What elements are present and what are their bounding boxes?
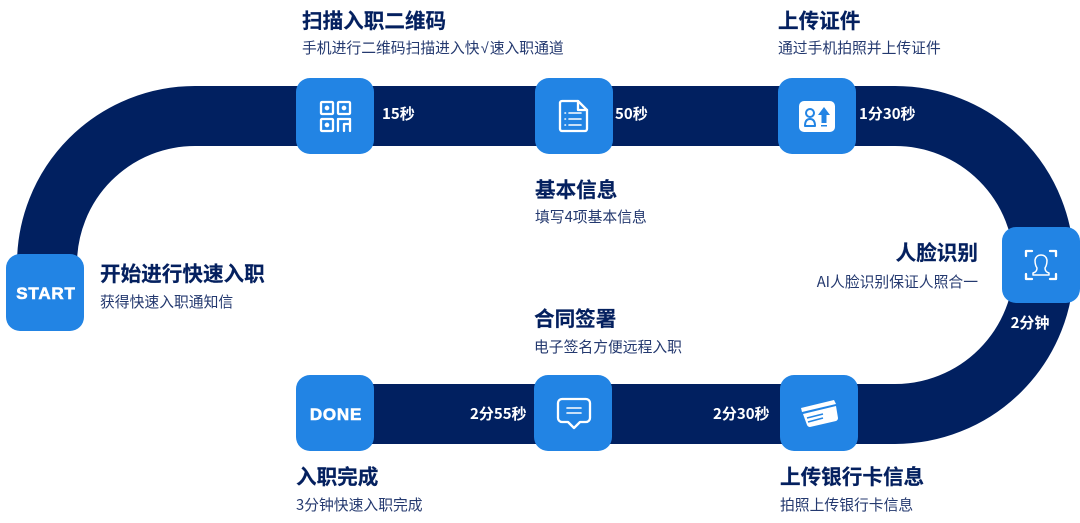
icon: document — [560, 101, 587, 131]
step: upload ID: 上传证件 — [778, 4, 860, 34]
step: bank card: 拍照上传银行卡信息 — [780, 494, 913, 515]
step: start — [6, 254, 265, 331]
step: start: 获得快速入职通知信 — [100, 291, 233, 312]
step: basic information: 50秒 — [615, 103, 648, 124]
step: face recognition — [817, 227, 1080, 333]
icon: ID upload — [799, 101, 835, 132]
step: upload ID: 通过手机拍照并上传证件 — [778, 37, 941, 58]
step: bank card — [713, 375, 924, 515]
step: contract signing: 合同签署 — [534, 302, 616, 332]
step: face recognition: AI人脸识别保证人照合一 — [817, 271, 978, 292]
step: done: DONE — [310, 405, 362, 424]
step: start: START — [16, 284, 76, 303]
step: scan QR code: 扫描入职二维码 — [302, 4, 446, 34]
step: bank card: 上传银行卡信息 — [780, 460, 924, 490]
step: contract signing: 2分55秒 — [470, 403, 527, 424]
icon: face scan — [1026, 251, 1056, 279]
icon: bank card — [801, 400, 838, 427]
step: start: 开始进行快速入职 — [100, 257, 265, 287]
step: upload ID: 1分30秒 — [859, 103, 916, 124]
step: done: 3分钟快速入职完成 — [296, 494, 423, 515]
step: face recognition: 人脸识别 — [896, 236, 978, 266]
process track — [47, 116, 1044, 414]
step: scan QR code: 15秒 — [382, 103, 415, 124]
step: basic information — [535, 78, 648, 227]
step: done — [296, 375, 423, 515]
step: scan QR code: 手机进行二维码扫描进入快√速入职通道 — [302, 37, 564, 58]
icon: message — [558, 399, 590, 428]
step: basic information: 基本信息 — [535, 173, 617, 203]
step: done: 入职完成 — [296, 460, 378, 490]
step: basic information: 填写4项基本信息 — [535, 206, 647, 227]
step: scan QR code — [296, 4, 564, 154]
step: bank card: 2分30秒 — [713, 403, 770, 424]
step: contract signing: 电子签名方便远程入职 — [534, 336, 682, 357]
step: face recognition: 2分钟 — [1011, 312, 1049, 333]
step: contract signing — [470, 302, 682, 451]
icon: QR code — [321, 102, 350, 131]
step: upload ID — [778, 4, 941, 154]
